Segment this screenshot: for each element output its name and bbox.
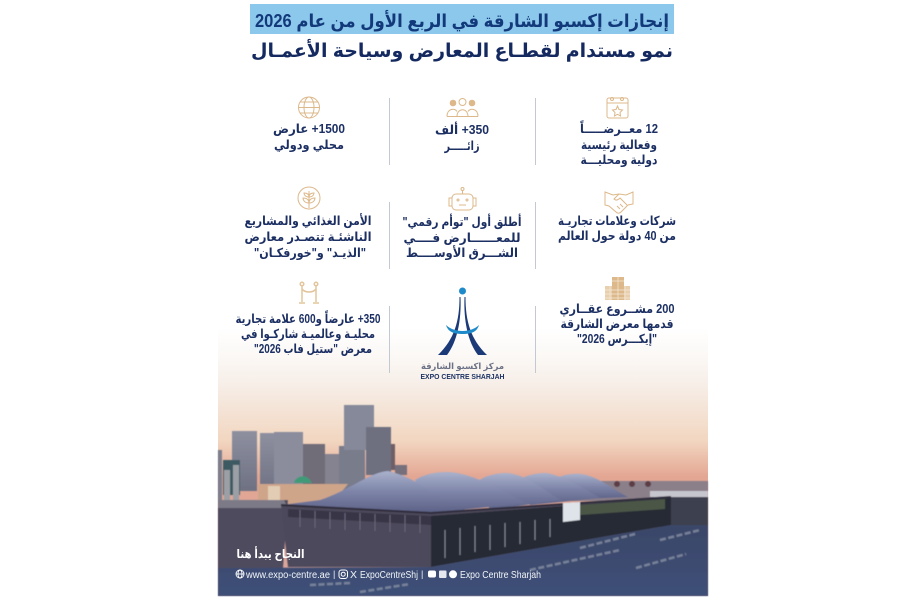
icon: handshake <box>605 192 633 213</box>
stat: companies from 40 countries: من 40 دولة حول العالم <box>558 229 676 243</box>
roof domes <box>281 471 628 513</box>
logo: Expo Centre Sharjah <box>420 288 504 381</box>
footer contact links: X <box>350 569 357 581</box>
text: Steel Fab: محليـة وعالميـة شاركـوا في <box>241 327 375 341</box>
footer contact links: | <box>333 569 335 579</box>
text: Steel Fab: 350+ عارضاً و600 علامة تجارية <box>236 309 381 326</box>
icon: globe <box>298 97 320 118</box>
stat: 350 thousand visitors: زائـــــر <box>444 139 480 153</box>
stat: companies from 40 countries: شركات وعلامات تجاريـة <box>558 214 676 228</box>
stat: 12 exhibitions: دولية ومحليـــة <box>580 153 658 167</box>
tagline: النجاح يبدأ هنا <box>236 546 304 561</box>
ground and car park <box>218 525 708 596</box>
horizon band behind the building <box>560 481 708 527</box>
stat: 350 thousand visitors <box>435 121 489 153</box>
stat: 12 exhibitions: 12 معــرضـــــاً <box>580 119 658 136</box>
text: Steel Fab <box>236 309 381 356</box>
footer contact links <box>236 569 541 581</box>
footer contact links: ExpoCentreShj <box>360 570 418 581</box>
stat: 12 exhibitions <box>580 119 658 167</box>
icon: calendar star <box>607 98 628 118</box>
logo: Expo Centre Sharjah: مركز اكسبو الشارقة <box>421 361 504 372</box>
text: digital twin: الشـــرق الأوســــط <box>406 245 518 260</box>
icon: building <box>605 277 630 300</box>
title highlight and heading: إنجازات إكسبو الشارقة في الربع الأول من عام 2026 <box>255 10 669 32</box>
text: Steel Fab: معرض "ستيل فاب 2026" <box>254 342 372 356</box>
text: 200 real estate projects: "إيكـــرس 2026" <box>577 332 657 346</box>
text: food security: الأمن الغذائي والمشاريع <box>244 213 372 228</box>
icon: wheat in circle <box>298 187 320 209</box>
icon: robot <box>449 188 476 210</box>
text: food security: "الذيـد" و"خورفكـان" <box>254 246 366 260</box>
skyline towers <box>218 405 407 500</box>
text: 200 real estate projects: 200 مشــروع عقــاري <box>560 302 675 316</box>
logo: Expo Centre Sharjah: EXPO CENTRE SHARJAH <box>420 374 504 381</box>
footer contact links: | <box>421 569 423 579</box>
icon: linkedin <box>439 570 446 578</box>
column dividers <box>390 98 536 373</box>
stat: 1500 exhibitors <box>273 122 345 152</box>
icon: instagram <box>339 570 348 578</box>
left low hall <box>218 500 288 568</box>
facade <box>281 497 671 567</box>
text: food security <box>244 213 372 260</box>
text: digital twin: للمعــــــارض فــــي <box>404 231 520 245</box>
panel: infographic background <box>218 0 708 596</box>
footer contact links: www.expo-centre.ae <box>245 570 330 581</box>
stat: 1500 exhibitors: 1500+ عارض <box>273 122 345 136</box>
text: digital twin <box>402 213 522 260</box>
title highlight and heading <box>250 4 674 34</box>
mall and green dome <box>258 476 348 508</box>
footer contact links: Expo Centre Sharjah <box>460 570 541 581</box>
icon: youtube <box>428 570 436 578</box>
text: digital twin: أطلق أول "توأم رقمي" <box>402 213 522 230</box>
stat: 12 exhibitions: وفعالية رئيسية <box>581 138 657 152</box>
icon: stanchion rope <box>299 282 319 303</box>
subtitle: نمو مستدام لقطـاع المعارض وسياحة الأعمـال <box>251 39 673 62</box>
icon: facebook <box>449 570 457 578</box>
text: food security: الناشئـة تتصـدر معارض <box>244 230 372 244</box>
stat: companies from 40 countries <box>558 214 676 243</box>
stat: 1500 exhibitors: محلي ودولي <box>274 138 344 152</box>
text: 200 real estate projects: قدمها معرض الشارقة <box>560 317 674 331</box>
icon: web globe <box>236 570 244 578</box>
text: 200 real estate projects <box>560 302 675 346</box>
photo: expo centre building and skyline <box>218 405 708 596</box>
stat: 350 thousand visitors: 350+ ألف <box>435 121 489 137</box>
icon: people group <box>447 98 478 116</box>
